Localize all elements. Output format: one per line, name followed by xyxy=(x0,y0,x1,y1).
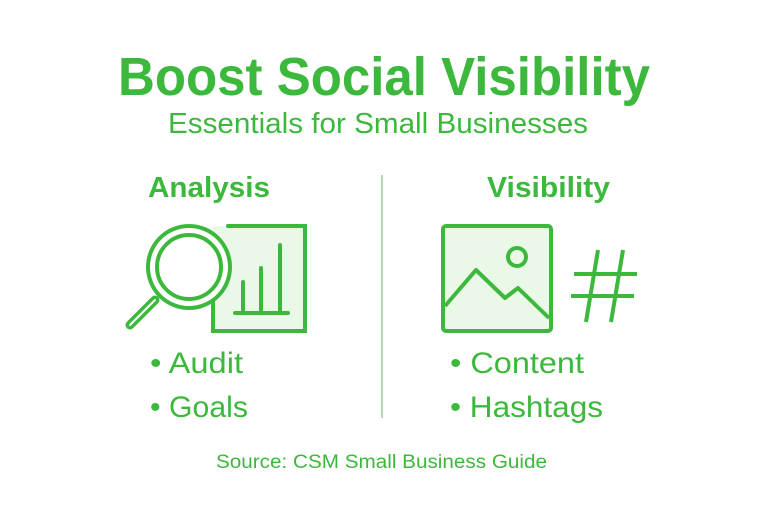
icon: magnifier with chart xyxy=(130,226,305,331)
bullets: analysis xyxy=(150,347,248,424)
heading: Visibility: Visibility xyxy=(487,172,610,204)
bullets: visibility: • Content xyxy=(450,347,585,380)
icon: image xyxy=(443,226,551,331)
divider xyxy=(381,175,383,418)
title: Boost Social Visibility xyxy=(118,47,650,107)
icon: hashtag xyxy=(571,250,637,322)
bullets: visibility xyxy=(450,347,603,424)
subtitle: Essentials for Small Businesses xyxy=(168,108,588,140)
heading: Analysis: Analysis xyxy=(148,172,270,204)
bullets: visibility: • Hashtags xyxy=(450,391,603,424)
bullets: analysis: • Goals xyxy=(150,391,248,424)
bullets: analysis: • Audit xyxy=(150,347,244,380)
source: Source: CSM Small Business Guide xyxy=(216,452,547,473)
